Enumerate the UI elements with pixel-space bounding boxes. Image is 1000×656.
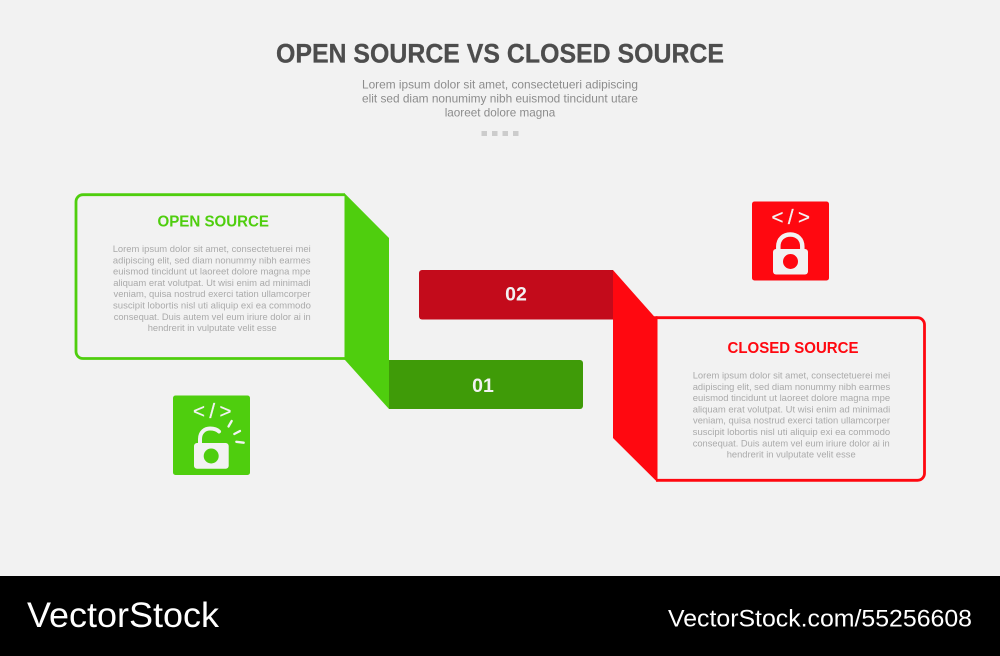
open source body text: hendrerit in vulputate velit esse: [148, 323, 277, 334]
open source body text: suscipit lobortis nisl uti aliquip exi ea commodo: [113, 300, 311, 312]
closed source body text: suscipit lobortis nisl uti aliquip exi ea commodo: [693, 427, 890, 438]
title dots: [482, 131, 518, 136]
subtitle text block: [362, 78, 638, 120]
open source body text: euismod tincidunt ut laoreet dolore magna mpe: [113, 267, 310, 278]
closed source body text: hendrerit in vulputate velit esse: [727, 450, 856, 461]
icon: open padlock with code tag: [173, 396, 250, 475]
step bar 02: [419, 270, 613, 320]
icon: closed padlock with code tag: [752, 202, 829, 280]
open source heading: OPEN SOURCE: [158, 214, 269, 230]
open source body text: adipiscing elit, sed diam nonummy nibh earmes: [113, 255, 311, 266]
title: OPEN SOURCE VS CLOSED SOURCE: [276, 38, 724, 68]
closed source body text: consequat. Duis autem vel eum iriure dolor ai in: [693, 438, 890, 449]
subtitle text block: Lorem ipsum dolor sit amet, consectetueri adipiscing: [362, 78, 638, 92]
closed source body text: aliquam erat volutpat. Ut wisi enim ad minimadi: [693, 404, 890, 415]
closed source body text: veniam, quisa nostrud exerci tation ullamcorper: [693, 416, 890, 427]
closed source heading: CLOSED SOURCE: [728, 340, 858, 357]
subtitle text block: laoreet dolore magna: [445, 106, 556, 120]
open source body text: aliquam erat volutpat. Ut wisi enim ad minimadi: [113, 278, 310, 289]
open source body text: veniam, quisa nostrud exerci tation ullamcorper: [114, 289, 310, 300]
panel: closed source: [419, 270, 924, 482]
open source body text: consequat. Duis autem vel eum iriure dolor ai in: [114, 312, 311, 323]
footer band: [0, 576, 1000, 656]
footer logo wordmark: VectorStock: [27, 595, 219, 635]
closed source body text: Lorem ipsum dolor sit amet, consectetuerei mei: [693, 370, 890, 382]
open source body text: Lorem ipsum dolor sit amet, consectetuerei mei: [113, 244, 311, 255]
closed source body text: adipiscing elit, sed diam nonummy nibh earmes: [693, 382, 890, 393]
open source body text: [113, 244, 311, 334]
step bar 01: [389, 360, 583, 409]
subtitle text block: elit sed diam nonumimy nibh euismod tincidunt utare: [362, 92, 638, 106]
red card outline: [656, 318, 924, 480]
green card outline: [76, 195, 345, 358]
step bar 01: 01: [472, 375, 494, 397]
green folded side: [344, 193, 389, 409]
panel: open source: [76, 193, 583, 409]
icon: open padlock with code tag: </>: [193, 400, 232, 423]
footer image id: VectorStock.com/55256608: [668, 606, 972, 632]
closed source body text: euismod tincidunt ut laoreet dolore magna mpe: [693, 393, 890, 404]
closed source body text: [693, 370, 890, 461]
step bar 02: 02: [505, 284, 527, 306]
icon: closed padlock with code tag: </>: [772, 206, 810, 229]
red folded side: [613, 270, 658, 482]
